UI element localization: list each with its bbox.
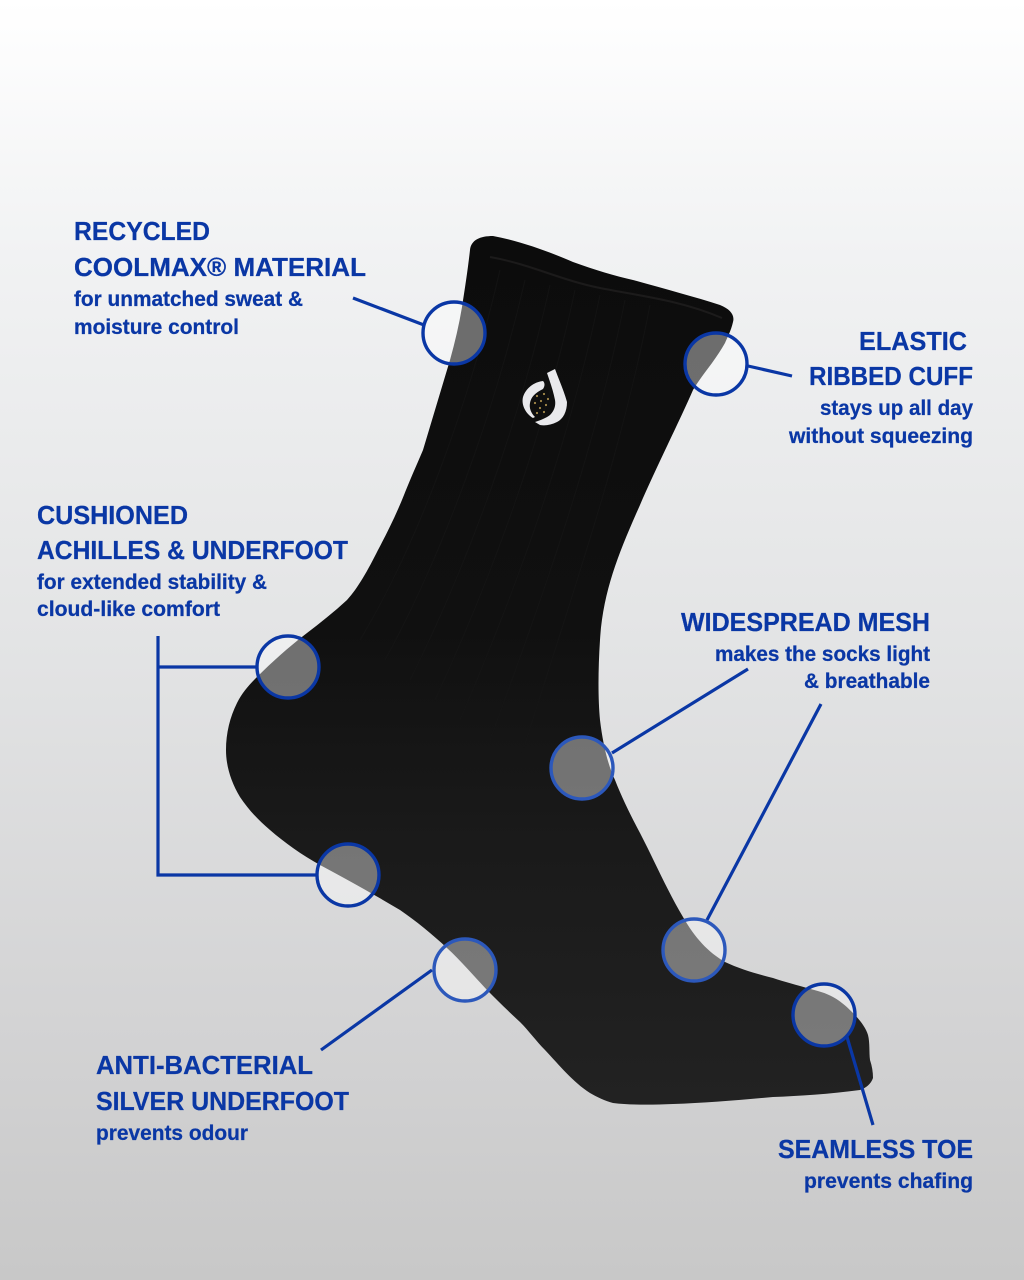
callout: cushioned achilles and underfoot: cloud-like comfort xyxy=(37,598,220,621)
connector: elastic cuff line xyxy=(748,366,792,376)
marker: achilles xyxy=(257,636,319,698)
callout: recycled coolmax material: RECYCLED xyxy=(74,216,210,246)
connector: coolmax callout line xyxy=(353,298,424,325)
callout: anti-bacterial silver underfoot: ANTI-BACTERIAL xyxy=(96,1050,313,1080)
callout: widespread mesh xyxy=(681,607,930,693)
callout: elastic ribbed cuff: stays up all day xyxy=(820,397,973,420)
callout: elastic ribbed cuff: without squeezing xyxy=(788,425,973,448)
callout: seamless toe: SEAMLESS TOE xyxy=(778,1134,973,1164)
marker: seamless toe xyxy=(793,984,855,1046)
marker: recycled material xyxy=(423,302,485,364)
callout: widespread mesh: & breathable xyxy=(804,670,930,693)
marker: underfoot xyxy=(317,844,379,906)
connector: seamless toe line xyxy=(847,1037,873,1125)
callout: recycled coolmax material: for unmatched sweat & xyxy=(74,288,303,311)
callout: elastic ribbed cuff: ELASTIC xyxy=(859,326,967,356)
icon: embroidered logo on sock xyxy=(523,369,567,425)
callout: widespread mesh: makes the socks light xyxy=(715,643,930,666)
connector: anti-bacterial line xyxy=(321,970,432,1050)
marker: mesh upper xyxy=(551,737,613,799)
callout: cushioned achilles and underfoot: for extended stability & xyxy=(37,571,267,594)
callout: cushioned achilles and underfoot: CUSHIONED xyxy=(37,500,188,530)
connector: widespread mesh line 1 xyxy=(612,669,748,753)
black crew sock xyxy=(226,236,873,1105)
callout: widespread mesh: WIDESPREAD MESH xyxy=(681,607,930,637)
callout: anti-bacterial silver underfoot: SILVER UNDERFOOT xyxy=(96,1086,349,1116)
callout: cushioned achilles and underfoot: ACHILLES & UNDERFOOT xyxy=(37,535,348,565)
connector: cushioned bracket xyxy=(158,636,317,875)
callout: recycled coolmax material: COOLMAX® MATERIAL xyxy=(74,252,366,282)
callout: recycled coolmax material xyxy=(74,216,366,339)
marker: silver underfoot xyxy=(434,939,496,1001)
marker: mesh lower xyxy=(663,919,725,981)
callout: anti-bacterial silver underfoot xyxy=(96,1050,349,1145)
callout: cushioned achilles and underfoot xyxy=(37,500,348,621)
connector: widespread mesh line 2 xyxy=(707,704,821,920)
callout: recycled coolmax material: moisture control xyxy=(74,316,239,339)
callout: elastic ribbed cuff xyxy=(788,326,973,448)
callout: seamless toe xyxy=(778,1134,973,1193)
callout: anti-bacterial silver underfoot: prevents odour xyxy=(96,1122,248,1145)
callout: seamless toe: prevents chafing xyxy=(804,1170,973,1193)
marker: elastic cuff xyxy=(685,333,747,395)
callout: elastic ribbed cuff: RIBBED CUFF xyxy=(809,361,973,391)
